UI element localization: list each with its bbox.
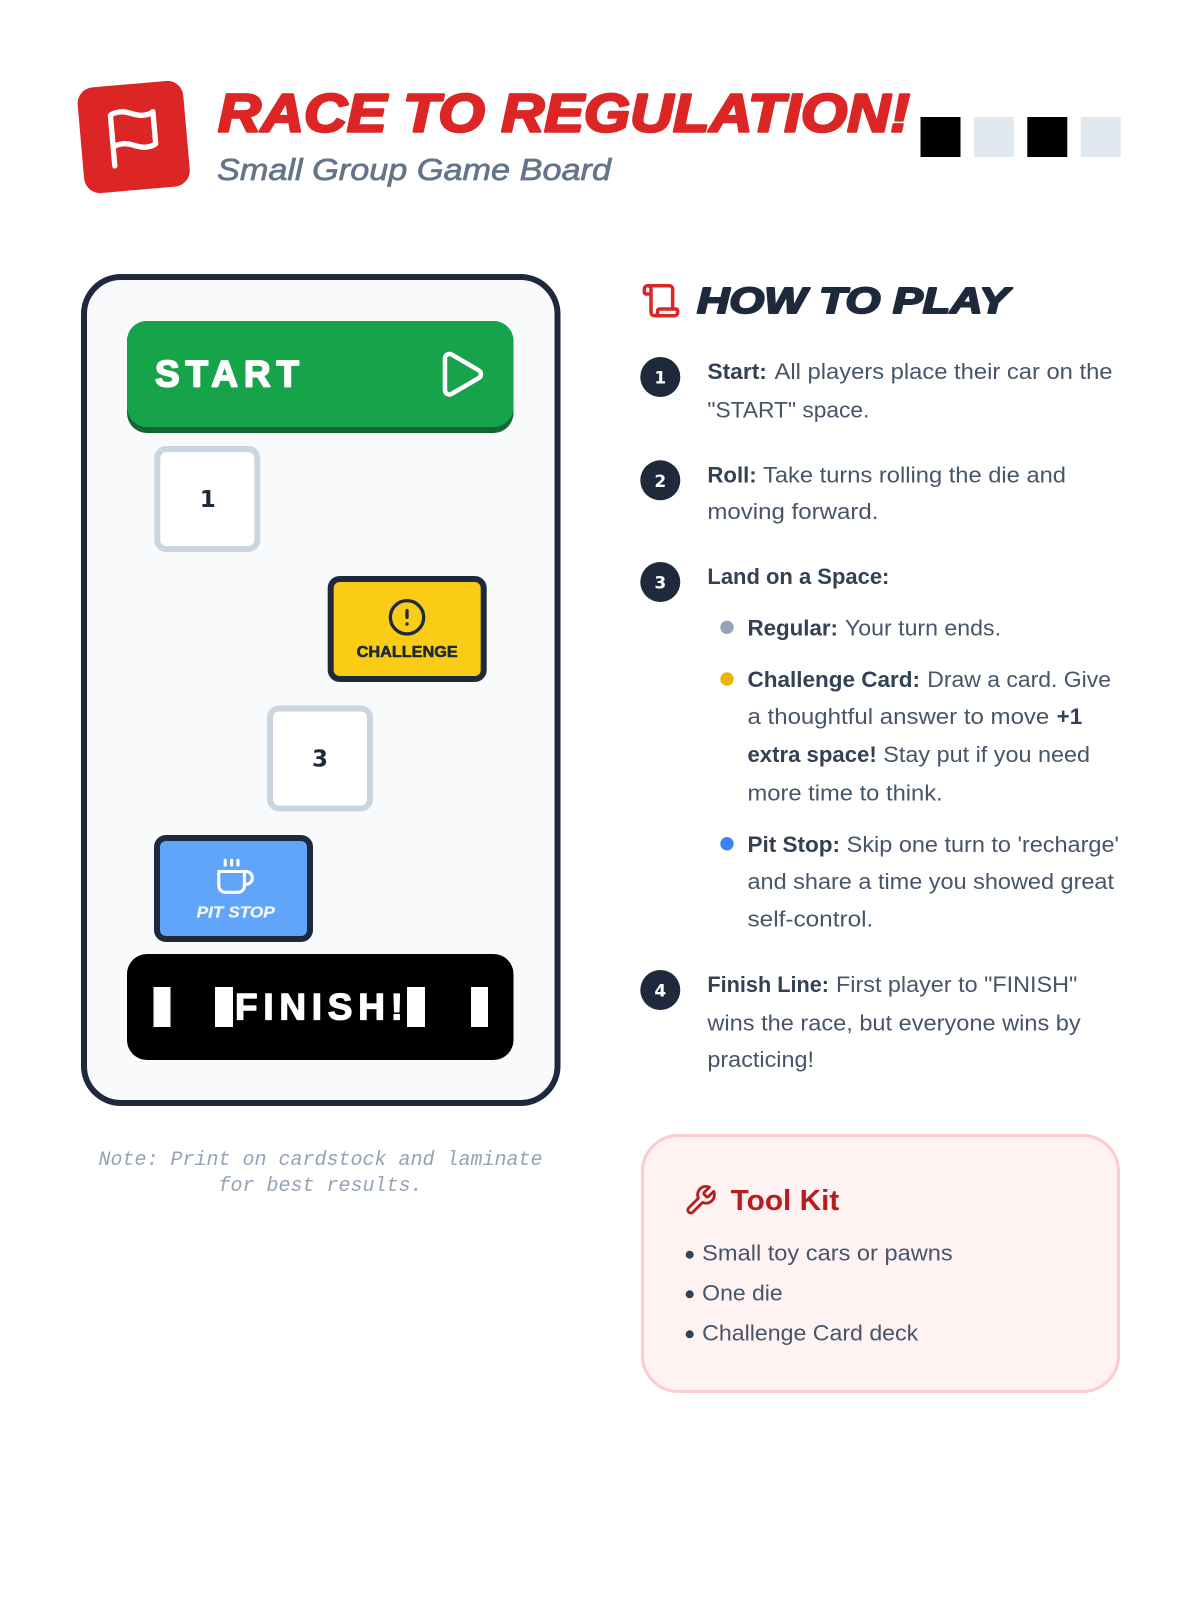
challenge card rule: extra space! <box>748 742 877 767</box>
challenge card rule: Stay put if you need <box>883 742 1090 767</box>
icon: alert circle <box>390 601 424 634</box>
pit stop label: PIT STOP <box>197 904 275 921</box>
subtitle: Small Group Game Board <box>217 152 613 187</box>
challenge card rule: more time to think. <box>748 781 943 806</box>
regular space rule: Regular: <box>748 616 838 641</box>
print note: for best results. <box>218 1175 423 1198</box>
step 4: wins the race, but everyone wins by <box>706 1011 1081 1036</box>
checker bars <box>154 987 488 1027</box>
tool kit heading: Tool Kit <box>731 1185 840 1217</box>
icon: red flag logo <box>76 80 191 194</box>
icon: play arrow <box>445 354 481 394</box>
step 3: 3 <box>654 574 666 594</box>
icon: wrench <box>688 1186 714 1213</box>
step 2: Take turns rolling the die and <box>763 462 1066 487</box>
step 2 <box>640 460 1066 524</box>
step 3: Land on a Space: <box>707 564 889 589</box>
tool kit list <box>686 1241 953 1345</box>
icon: scroll <box>644 286 678 316</box>
tool kit list: Challenge Card deck <box>702 1320 919 1345</box>
pit stop rule: and share a time you showed great <box>748 869 1114 894</box>
step 4: Finish Line: <box>707 972 829 997</box>
space 1: 1 <box>200 487 216 513</box>
header <box>76 80 1121 194</box>
step 1: All players place their car on the <box>774 359 1112 384</box>
step 4: practicing! <box>707 1047 814 1072</box>
how to play heading <box>644 280 1013 321</box>
step 3 <box>640 562 1119 931</box>
step 4: 4 <box>654 982 666 1002</box>
space 3: 3 <box>312 746 328 772</box>
start space <box>127 321 514 433</box>
challenge space <box>331 579 484 679</box>
heading text: HOW TO PLAY <box>697 280 1013 321</box>
pit stop rule: Pit Stop: <box>748 832 840 857</box>
challenge card rule: a thoughtful answer to move <box>748 704 1049 729</box>
pit stop rule <box>720 832 1119 931</box>
step 4 <box>640 970 1081 1072</box>
space 3 <box>270 708 370 808</box>
step 4: First player to "FINISH" <box>836 972 1077 997</box>
step 1 <box>640 357 1112 422</box>
challenge card rule: +1 <box>1057 704 1082 729</box>
step 1: 1 <box>654 368 666 388</box>
tool kit list: Small toy cars or pawns <box>702 1241 953 1266</box>
pit stop space <box>157 838 310 939</box>
checkered squares <box>920 117 1121 157</box>
title: RACE TO REGULATION! <box>218 84 910 144</box>
regular space rule <box>720 616 1001 641</box>
pit stop rule: self-control. <box>748 906 873 931</box>
step 1: "START" space. <box>707 397 869 422</box>
step 2: Roll: <box>707 462 757 487</box>
step 2: 2 <box>654 472 666 492</box>
pit stop rule: Skip one turn to 'recharge' <box>847 832 1119 857</box>
step 1: Start: <box>707 359 767 384</box>
finish space <box>127 954 514 1060</box>
space 1 <box>157 449 257 549</box>
print note <box>98 1149 543 1198</box>
tool kit list: One die <box>702 1280 783 1305</box>
finish label: FINISH! <box>235 986 403 1028</box>
challenge card rule: Challenge Card: <box>748 667 920 692</box>
icon: coffee cup <box>219 860 252 892</box>
panel: game board <box>84 277 558 1103</box>
start label: START <box>155 354 299 394</box>
regular space rule: Your turn ends. <box>845 616 1001 641</box>
challenge card rule: Draw a card. Give <box>927 667 1111 692</box>
challenge card rule <box>720 667 1111 806</box>
print note: Note: Print on cardstock and laminate <box>98 1149 543 1172</box>
panel: tool kit <box>642 1136 1118 1392</box>
step 2: moving forward. <box>707 499 878 524</box>
challenge label: CHALLENGE <box>357 644 458 661</box>
